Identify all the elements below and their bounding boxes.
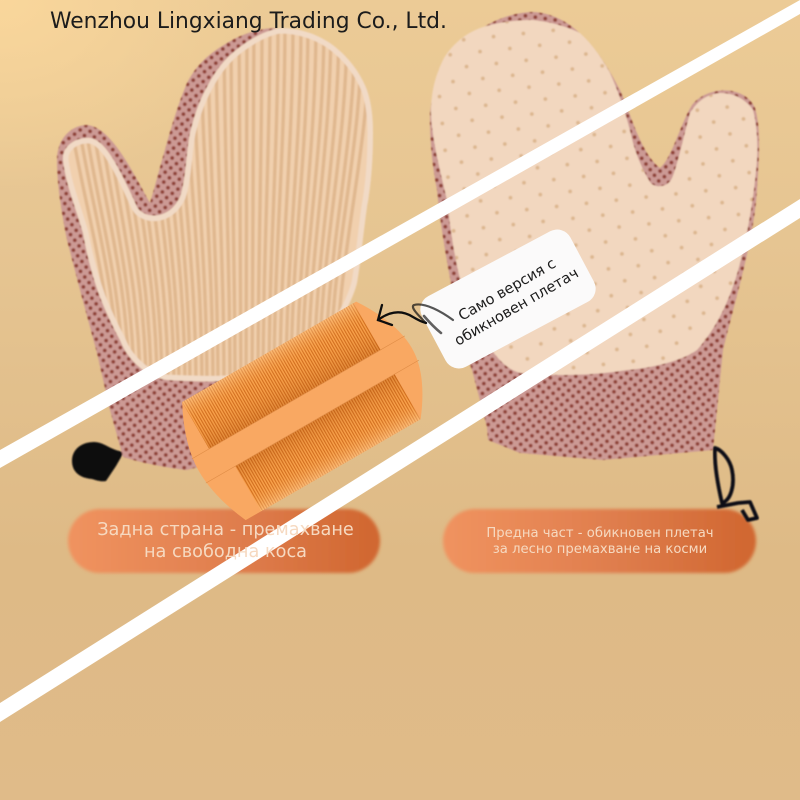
callout: plain knit version: обикновен плетач [452,265,582,349]
mesh backing of back mitten [57,28,373,470]
front pill background [443,509,756,573]
icon: orange double sided comb [165,289,445,528]
callout bubble [415,224,601,374]
icon: black drawstring toggle [72,442,124,481]
back pill text: на свободна коса [144,542,307,562]
front pill text: Предна част - обикновен плетач [486,525,714,541]
callout: plain knit version [415,224,601,374]
back pill background [68,509,380,573]
callout text: Само версия с [456,255,559,324]
panel: front side mitten [430,12,759,460]
panel: back side label pill [68,509,380,573]
title: Wenzhou Lingxiang Trading Co., Ltd. [50,9,447,34]
stripe: lower white diagonal [0,199,800,722]
front pill text: за лесно премахване на косми [493,542,707,557]
ridged palm of back mitten [50,20,380,390]
icon: black drawstring cord [715,448,757,520]
panel: back side mitten [50,20,380,481]
arrow: callout to comb [378,304,453,333]
comb upper teeth [182,303,381,449]
back pill text: Задна страна - премахване [97,520,354,540]
mesh backing of front mitten [430,12,759,460]
panel: front side label pill [443,509,756,573]
dotted palm of front mitten [431,20,757,375]
stripe: upper white diagonal [0,0,800,468]
comb lower teeth [235,374,421,511]
